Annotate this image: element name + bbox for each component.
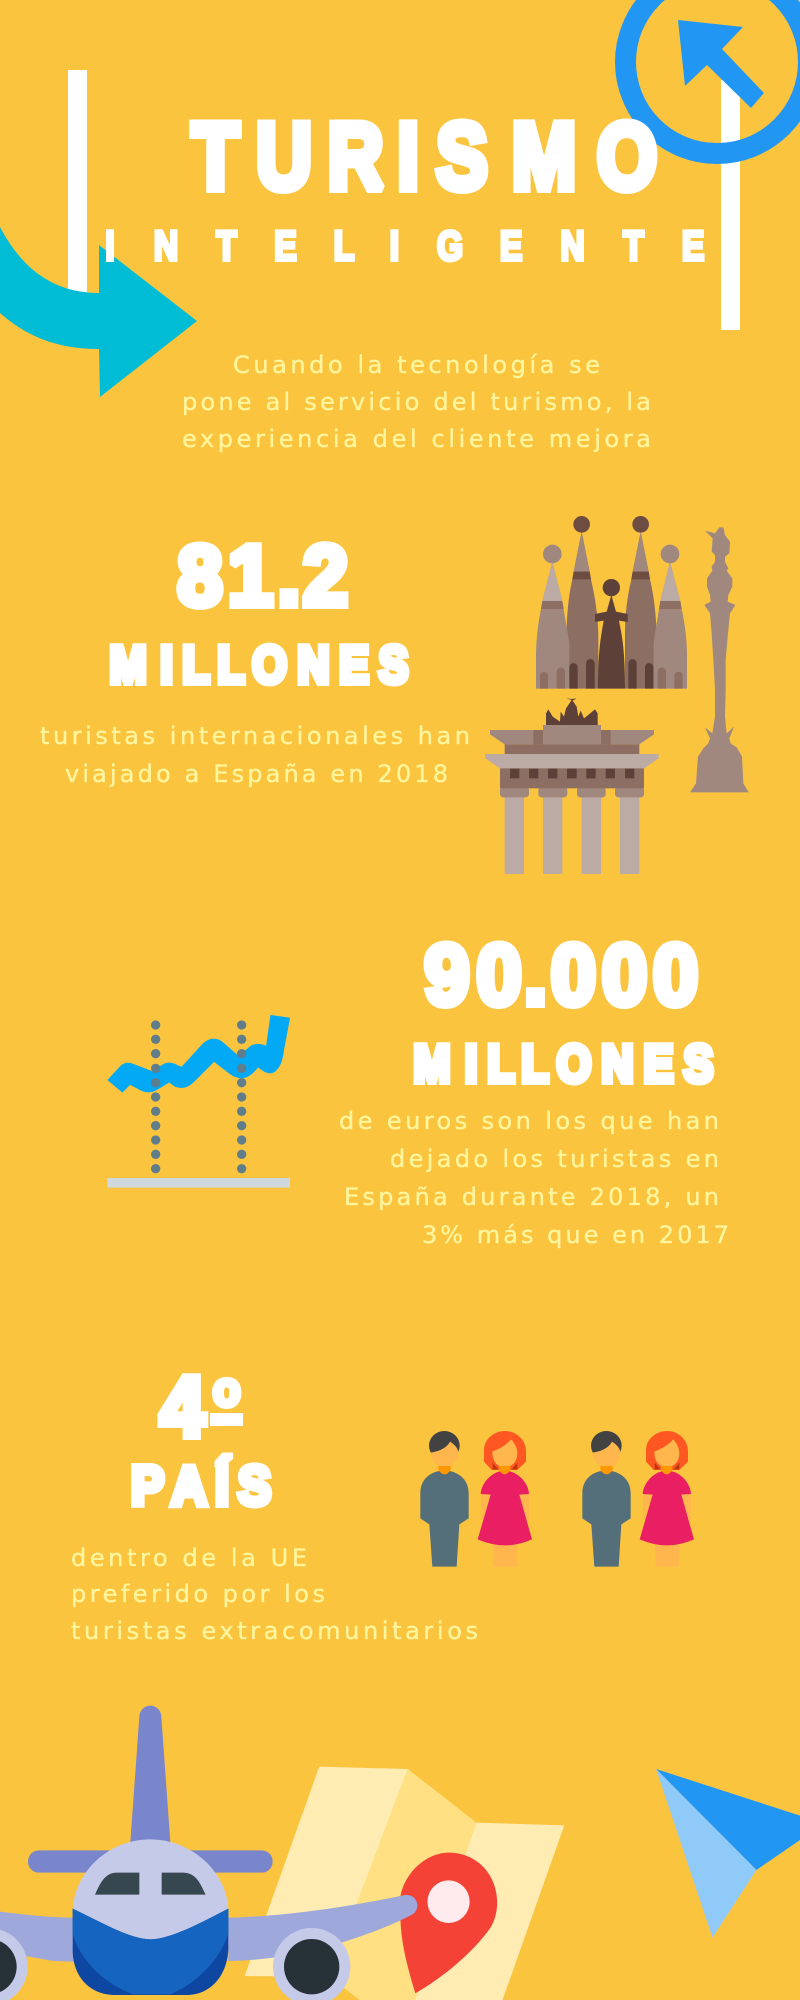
icon: second couple: [582, 1431, 694, 1567]
stat number: 90.000: [425, 927, 698, 1022]
stat description: dejado los turistas en: [390, 1145, 719, 1173]
stat unit: MILLONES: [110, 636, 408, 694]
intro text: [182, 351, 651, 453]
stat unit: PAÍS: [131, 1456, 271, 1517]
panel: 4º país stat: [71, 1359, 478, 1645]
stat description: España durante 2018, un: [344, 1183, 719, 1211]
stat description: [339, 1107, 729, 1249]
intro text: experiencia del cliente mejora: [182, 425, 651, 453]
stat description: turistas internacionales han: [40, 722, 470, 750]
icon: blue circle with arrow: [626, 0, 800, 154]
panel: 81.2 millones stat: [40, 528, 470, 788]
panel: 90.000 millones stat: [339, 927, 729, 1249]
stat description: [40, 722, 470, 788]
stat number: 4: [160, 1359, 205, 1454]
right white bar: [721, 80, 740, 330]
icon: map with pin: [245, 1767, 564, 2000]
location pin: [400, 1853, 497, 1993]
stat number: º: [213, 1362, 240, 1452]
stat description: dentro de la UE: [71, 1544, 307, 1572]
intro text: Cuando la tecnología se: [233, 351, 600, 379]
icon: Columbus column: [690, 527, 749, 792]
icon: airplane: [0, 1706, 417, 2000]
left white bar: [68, 70, 87, 295]
stat number: 81.2: [178, 528, 348, 623]
intro text: pone al servicio del turismo, la: [182, 388, 651, 416]
stat description: preferido por los: [71, 1580, 325, 1608]
icon: paper plane: [656, 1769, 800, 1938]
stat description: viajado a España en 2018: [65, 760, 448, 788]
title: TURISMO: [192, 104, 657, 209]
icon: Sagrada Familia: [536, 516, 687, 689]
icon: two couples: [420, 1431, 694, 1567]
title: INTELIGENTE: [105, 224, 704, 270]
stat description: turistas extracomunitarios: [71, 1617, 478, 1645]
icon: first couple: [420, 1431, 532, 1567]
map sheets: [245, 1767, 564, 2000]
icon: monuments: [485, 516, 749, 874]
stat description: 3% más que en 2017: [422, 1221, 729, 1249]
icon: cyan curved arrow: [0, 227, 197, 397]
icon: Brandenburg Gate: [485, 698, 659, 874]
chart: rising line: [107, 1016, 290, 1188]
stat number: [160, 1359, 243, 1454]
stat description: [71, 1544, 478, 1645]
stat unit: MILLONES: [414, 1035, 713, 1093]
title: [105, 104, 704, 270]
stat description: de euros son los que han: [339, 1107, 719, 1135]
